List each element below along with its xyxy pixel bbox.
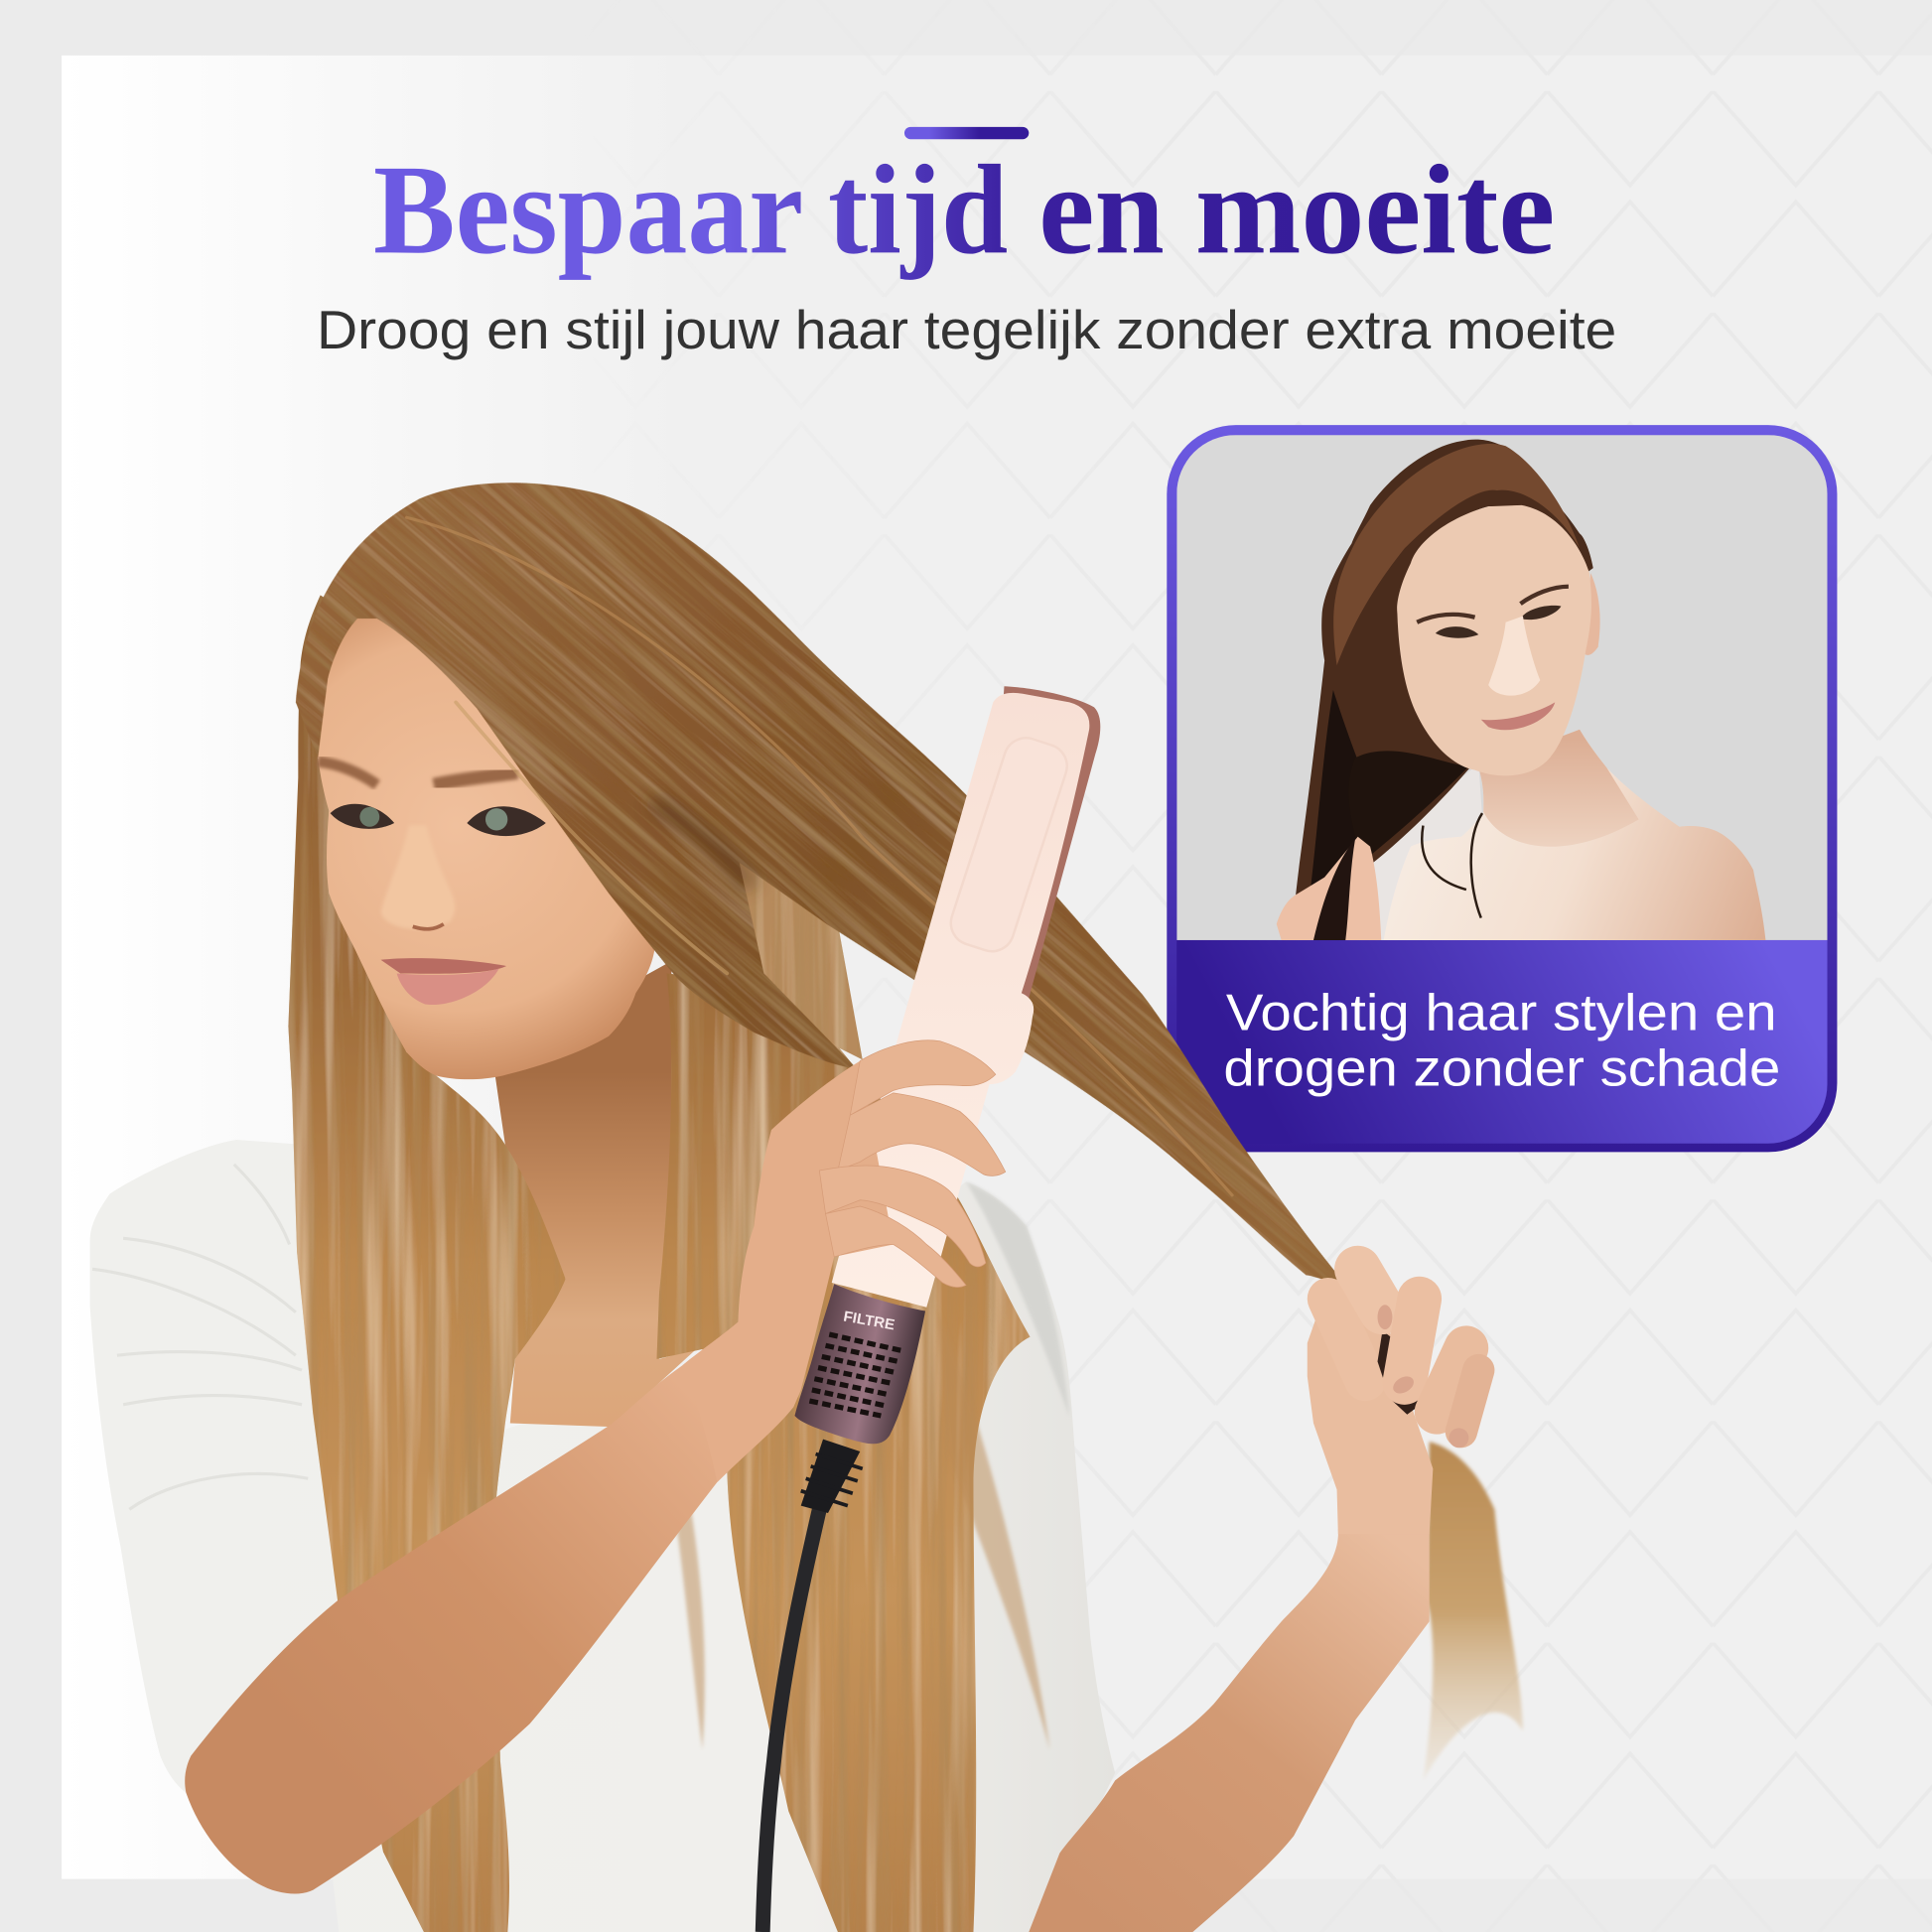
- thumb: [1328, 1299, 1365, 1380]
- palm: [683, 1061, 894, 1482]
- finger three: [819, 1166, 986, 1267]
- dark filter base: [794, 1284, 925, 1444]
- caption text: drogen zonder schade: [1223, 1038, 1780, 1096]
- finger three: [1437, 1348, 1466, 1412]
- finger two: [1405, 1299, 1420, 1382]
- shirt shading on right: [966, 1181, 1069, 1417]
- panel: wet hair callout card: [1167, 425, 1837, 1152]
- device body: [832, 693, 1089, 1308]
- finger nails: [1378, 1305, 1468, 1448]
- chest and neck: [492, 961, 696, 1427]
- plate edge: [986, 686, 1100, 998]
- back hair right side: [656, 973, 1031, 1932]
- vent grille: [809, 1334, 900, 1416]
- shirt: [90, 1140, 1115, 1932]
- caption text: Vochtig haar stylen en: [1226, 984, 1777, 1041]
- straightener device: [762, 686, 1100, 1932]
- finger two: [838, 1093, 1006, 1175]
- finger four: [1461, 1370, 1478, 1432]
- accent bar above title: [904, 127, 1029, 139]
- left hand holding device: [683, 1040, 1006, 1482]
- background panel: [62, 56, 560, 1878]
- strain relief with ribs: [801, 1440, 863, 1513]
- main hair sweep to the right: [296, 483, 1337, 1281]
- card frame: [1167, 425, 1837, 1152]
- sleeve folds: [92, 1165, 308, 1509]
- photo: main woman with straightener: [89, 483, 1525, 1932]
- photo: woman with wet hair: [1176, 435, 1828, 940]
- highlighted hair strands: [407, 517, 1232, 1195]
- finger one: [1358, 1269, 1382, 1311]
- title: Bespaar: [373, 138, 803, 280]
- title: en: [1038, 138, 1165, 280]
- blond back hair patch: [739, 862, 863, 1059]
- dark hair shadow patch: [653, 801, 752, 888]
- title: tijd: [828, 138, 1008, 280]
- left arm: [185, 1322, 801, 1894]
- face: [318, 617, 655, 1079]
- finger one: [850, 1040, 996, 1115]
- brand label: FILTRE: [842, 1310, 896, 1333]
- subtitle: Droog en stijl jouw haar tegelijk zonder extra moeite: [317, 300, 1616, 360]
- finger four: [826, 1206, 966, 1288]
- hair tail below right hand: [1423, 1442, 1523, 1780]
- caption text: [1223, 984, 1780, 1096]
- palm: [1308, 1294, 1433, 1534]
- right hand holding hair: [1308, 1269, 1478, 1534]
- title: [373, 138, 1555, 280]
- hair wisps over shirt: [675, 1307, 1049, 1749]
- raised panel on device: [945, 732, 1072, 957]
- cable: [762, 1509, 819, 1932]
- right arm: [1029, 1529, 1430, 1932]
- held hair between fingers: [1378, 1330, 1430, 1415]
- long hair left side: [288, 595, 566, 1932]
- caption band: [1176, 940, 1828, 1144]
- title: moeite: [1195, 138, 1555, 280]
- facial features: [318, 761, 546, 1005]
